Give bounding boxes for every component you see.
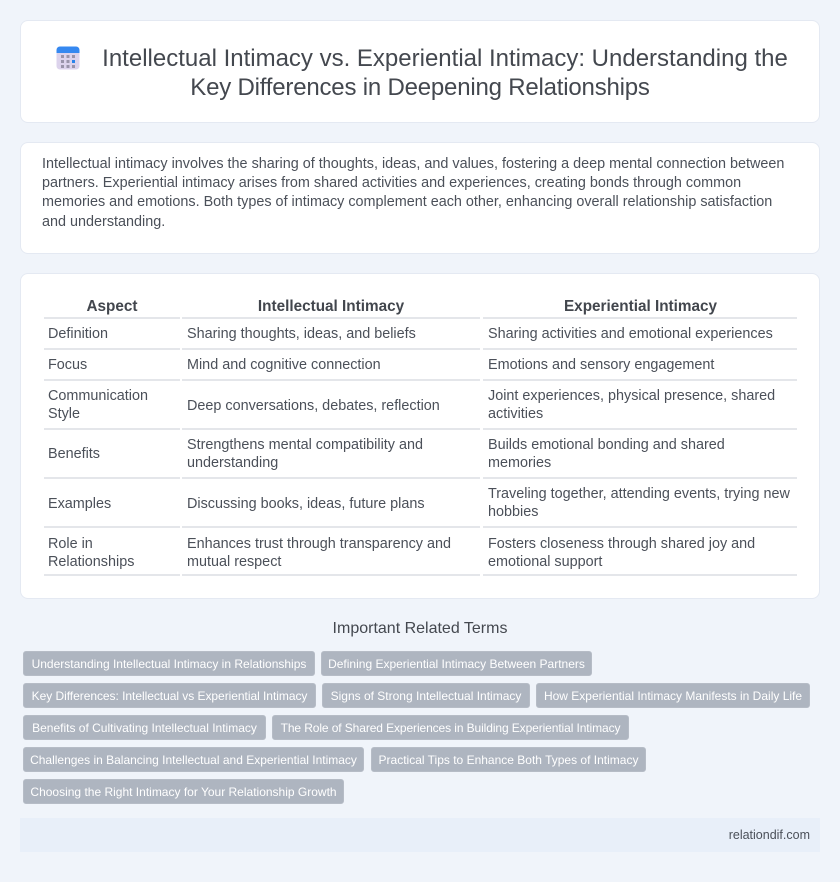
row: role in relationships (48, 536, 755, 570)
comparison table (44, 298, 797, 576)
related term tags: Challenges in Balancing Intellectual and Experiential Intimacy (30, 753, 357, 767)
row: benefits: Builds emotional bonding and shared (488, 437, 725, 453)
row: communication style (48, 388, 775, 422)
row: examples: Traveling together, attending events, trying new (488, 486, 790, 502)
related term tags: How Experiential Intimacy Manifests in Daily Life (544, 689, 802, 703)
row: focus (48, 357, 714, 373)
related term tags: Practical Tips to Enhance Both Types of Intimacy (379, 753, 638, 767)
row: examples: hobbies (488, 504, 538, 520)
row: examples: Examples (48, 496, 111, 512)
related terms heading: Important Related Terms (333, 620, 507, 637)
row: role in relationships: Relationships (48, 554, 134, 570)
row: examples: Discussing books, ideas, future plans (187, 496, 425, 512)
title: Intellectual Intimacy vs. Experiential Intimacy: Understanding the (102, 45, 788, 72)
table panel (20, 273, 820, 599)
related term tags: The Role of Shared Experiences in Building Experiential Intimacy (281, 721, 620, 735)
table header: Aspect (86, 298, 138, 315)
intro panel (20, 142, 820, 254)
related term tags (23, 651, 810, 804)
row: benefits: understanding (187, 455, 278, 471)
row: definition (48, 326, 773, 342)
row: communication style: Style (48, 406, 80, 422)
row: communication style: Communication (48, 388, 148, 404)
row: benefits: Strengthens mental compatibility and (187, 437, 423, 453)
row: focus: Focus (48, 357, 87, 373)
row: examples (48, 486, 790, 520)
row: role in relationships: Fosters closeness through shared joy and (488, 536, 755, 552)
row: role in relationships: Enhances trust through transparency and (187, 536, 451, 552)
icon: calendar (56, 46, 80, 70)
table header (86, 298, 717, 315)
table header: Intellectual Intimacy (258, 298, 404, 315)
related term tags: Signs of Strong Intellectual Intimacy (331, 689, 521, 703)
footer bar (20, 818, 820, 852)
row: benefits: memories (488, 455, 551, 471)
row: role in relationships: mutual respect (187, 554, 281, 570)
title (102, 45, 788, 101)
related term tags: Benefits of Cultivating Intellectual Intimacy (32, 721, 257, 735)
row: focus: Mind and cognitive connection (187, 357, 381, 373)
intro text: Intellectual intimacy involves the sharing of thoughts, ideas, and values, fostering a deep mental connection between (42, 156, 784, 172)
intro text: and understanding. (42, 214, 165, 230)
footer site name: relationdif.com (729, 828, 810, 842)
related term tags: Choosing the Right Intimacy for Your Relationship Growth (30, 785, 337, 799)
row: definition: Sharing activities and emotional experiences (488, 326, 773, 342)
row: communication style: Deep conversations, debates, reflection (187, 398, 440, 414)
intro text: partners. Experiential intimacy arises from shared activities and experiences, creating bonds through common (42, 175, 741, 191)
row: role in relationships: emotional support (488, 554, 602, 570)
related term tags: Key Differences: Intellectual vs Experiential Intimacy (32, 689, 307, 703)
row: focus: Emotions and sensory engagement (488, 357, 714, 373)
title: Key Differences in Deepening Relationships (190, 74, 650, 101)
header panel (20, 20, 820, 123)
row: communication style: Joint experiences, physical presence, shared (488, 388, 775, 404)
intro text (42, 156, 784, 230)
related term tags: Understanding Intellectual Intimacy in Relationships (32, 657, 306, 671)
row: benefits (48, 437, 725, 471)
table header: Experiential Intimacy (564, 298, 717, 315)
related term tags: Defining Experiential Intimacy Between Partners (328, 657, 585, 671)
intro text: memories and emotions. Both types of intimacy complement each other, enhancing overall relationship satisfaction (42, 194, 772, 210)
row: communication style: activities (488, 406, 543, 422)
row: benefits: Benefits (48, 446, 100, 462)
row: role in relationships: Role in (48, 536, 93, 552)
row: definition: Definition (48, 326, 108, 342)
row: definition: Sharing thoughts, ideas, and beliefs (187, 326, 416, 342)
